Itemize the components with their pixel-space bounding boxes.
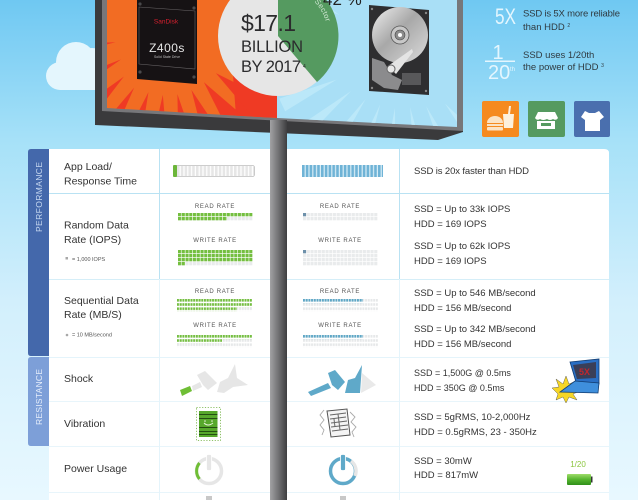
icon: laptop 5X <box>552 359 599 403</box>
tab: performance: PERFORMANCE <box>34 162 44 232</box>
label: sequential data rate: Sequential Data <box>64 295 139 307</box>
market size <box>241 10 306 76</box>
stat: 1/20th power: th <box>510 67 515 73</box>
tab: performance <box>28 149 49 356</box>
cloud <box>46 42 108 90</box>
icon: food <box>482 101 519 137</box>
stat: 5X more reliable: than HDD <box>523 22 565 33</box>
market size: $17.1 <box>241 10 296 36</box>
text: power: SSD = 30mW <box>414 456 472 467</box>
write rate label: WRITE RATE <box>193 323 237 329</box>
label: shock: Shock <box>64 373 94 385</box>
read rate label: READ RATE <box>320 204 360 210</box>
stat: 1/20th power: 1 <box>492 42 504 64</box>
icon: battery 1/20 <box>567 460 592 485</box>
text: vibration: HDD = 0.5gRMS, 23 - 350Hz <box>414 427 537 438</box>
read rate label: READ RATE <box>320 289 360 295</box>
drive caption: Solid State Drive <box>154 55 180 59</box>
label: random data rate: Rate (IOPS) <box>64 234 121 246</box>
market size: BILLION <box>241 38 303 56</box>
hard disk drive <box>369 5 429 95</box>
legend: mb per second: = 10 MB/second <box>72 332 112 338</box>
icon: storefront <box>528 101 565 137</box>
icon: next row HDD stub <box>340 496 346 500</box>
HDD random rate <box>303 204 378 266</box>
write rate label: WRITE RATE <box>193 238 237 244</box>
right column stats <box>414 166 537 481</box>
icon: HDD vibration book <box>320 409 356 437</box>
stat: 1/20th power <box>485 42 604 84</box>
HDD sequential rate <box>303 289 378 348</box>
text: shock: HDD = 350G @ 0.5ms <box>414 383 505 393</box>
icon: SSD vibration smile <box>196 408 220 440</box>
text: power: HDD = 817mW <box>414 470 478 481</box>
text: sequential write: HDD = 156 MB/second <box>414 339 511 350</box>
tab: resistance <box>28 357 49 446</box>
SSD drive <box>137 0 197 84</box>
stat: 5X more reliable: SSD is 5X more reliable <box>523 8 620 20</box>
billboard pole <box>270 120 287 500</box>
text: random read: SSD = Up to 33k IOPS <box>414 204 510 215</box>
row labels <box>64 161 139 475</box>
text: sequential read: HDD = 156 MB/second <box>414 303 511 314</box>
label: random data rate: Random Data <box>64 220 129 232</box>
label: app load: App Load/ <box>64 161 112 173</box>
SSD random rate <box>178 204 253 266</box>
legend: iops: = 1,000 IOPS <box>72 257 106 263</box>
text: app load: SSD is 20x faster than HDD <box>414 166 529 177</box>
market size: 4 <box>303 64 306 70</box>
label: vibration: Vibration <box>64 418 105 430</box>
icon: laptop 5X: 5X <box>579 367 590 377</box>
text: vibration: SSD = 5gRMS, 10-2,000Hz <box>414 412 530 423</box>
row and column dividers <box>49 149 609 500</box>
comparison table <box>28 149 609 500</box>
model name: Z400s <box>149 41 185 55</box>
write rate label: WRITE RATE <box>318 238 362 244</box>
text: random write: SSD = Up to 62k IOPS <box>414 241 510 252</box>
stat: 5X more reliable <box>495 4 620 33</box>
write rate label: WRITE RATE <box>318 323 362 329</box>
text: shock: SSD = 1,500G @ 0.5ms <box>414 368 511 378</box>
text: random write: HDD = 169 IOPS <box>414 256 487 267</box>
billboard <box>95 0 463 140</box>
stat: 1/20th power: the power of HDD <box>523 62 599 73</box>
icon: next row SSD stub <box>206 496 212 500</box>
label: power usage: Power Usage <box>64 463 127 475</box>
SSD load bar <box>173 165 254 177</box>
SanDisk logo: SanDisk <box>154 18 179 26</box>
icon: HDD shock hammer <box>308 365 376 396</box>
tab: resistance: RESISTANCE <box>34 369 44 425</box>
icon: SSD power <box>196 454 222 484</box>
icon: HDD power <box>330 454 356 484</box>
SSD half of billboard <box>107 0 277 118</box>
pie chart: retail sector <box>218 0 362 96</box>
stat: 5X more reliable: 5X <box>495 4 516 29</box>
stat: 1/20th power: 20 <box>488 62 510 84</box>
stat: 1/20th power: 3 <box>601 63 604 69</box>
HDD half of billboard <box>277 0 457 127</box>
text: sequential read: SSD = Up to 546 MB/second <box>414 288 536 299</box>
icon: SSD shock hammer <box>180 364 248 396</box>
read rate label: READ RATE <box>195 204 235 210</box>
SSD sequential rate <box>177 289 252 348</box>
HDD load bar <box>302 165 383 177</box>
icon: battery 1/20: 1/20 <box>570 460 586 469</box>
icon: t-shirt <box>574 101 610 137</box>
text: sequential write: SSD = Up to 342 MB/second <box>414 324 536 335</box>
stat: 5X more reliable: 2 <box>567 23 570 29</box>
stat: 1/20th power: SSD uses 1/20th <box>523 50 594 61</box>
text: random read: HDD = 169 IOPS <box>414 219 487 230</box>
label: app load: Response Time <box>64 176 137 188</box>
market size: BY 2017 <box>241 58 301 76</box>
label: sequential data rate: Rate (MB/S) <box>64 309 122 321</box>
read rate label: READ RATE <box>195 289 235 295</box>
